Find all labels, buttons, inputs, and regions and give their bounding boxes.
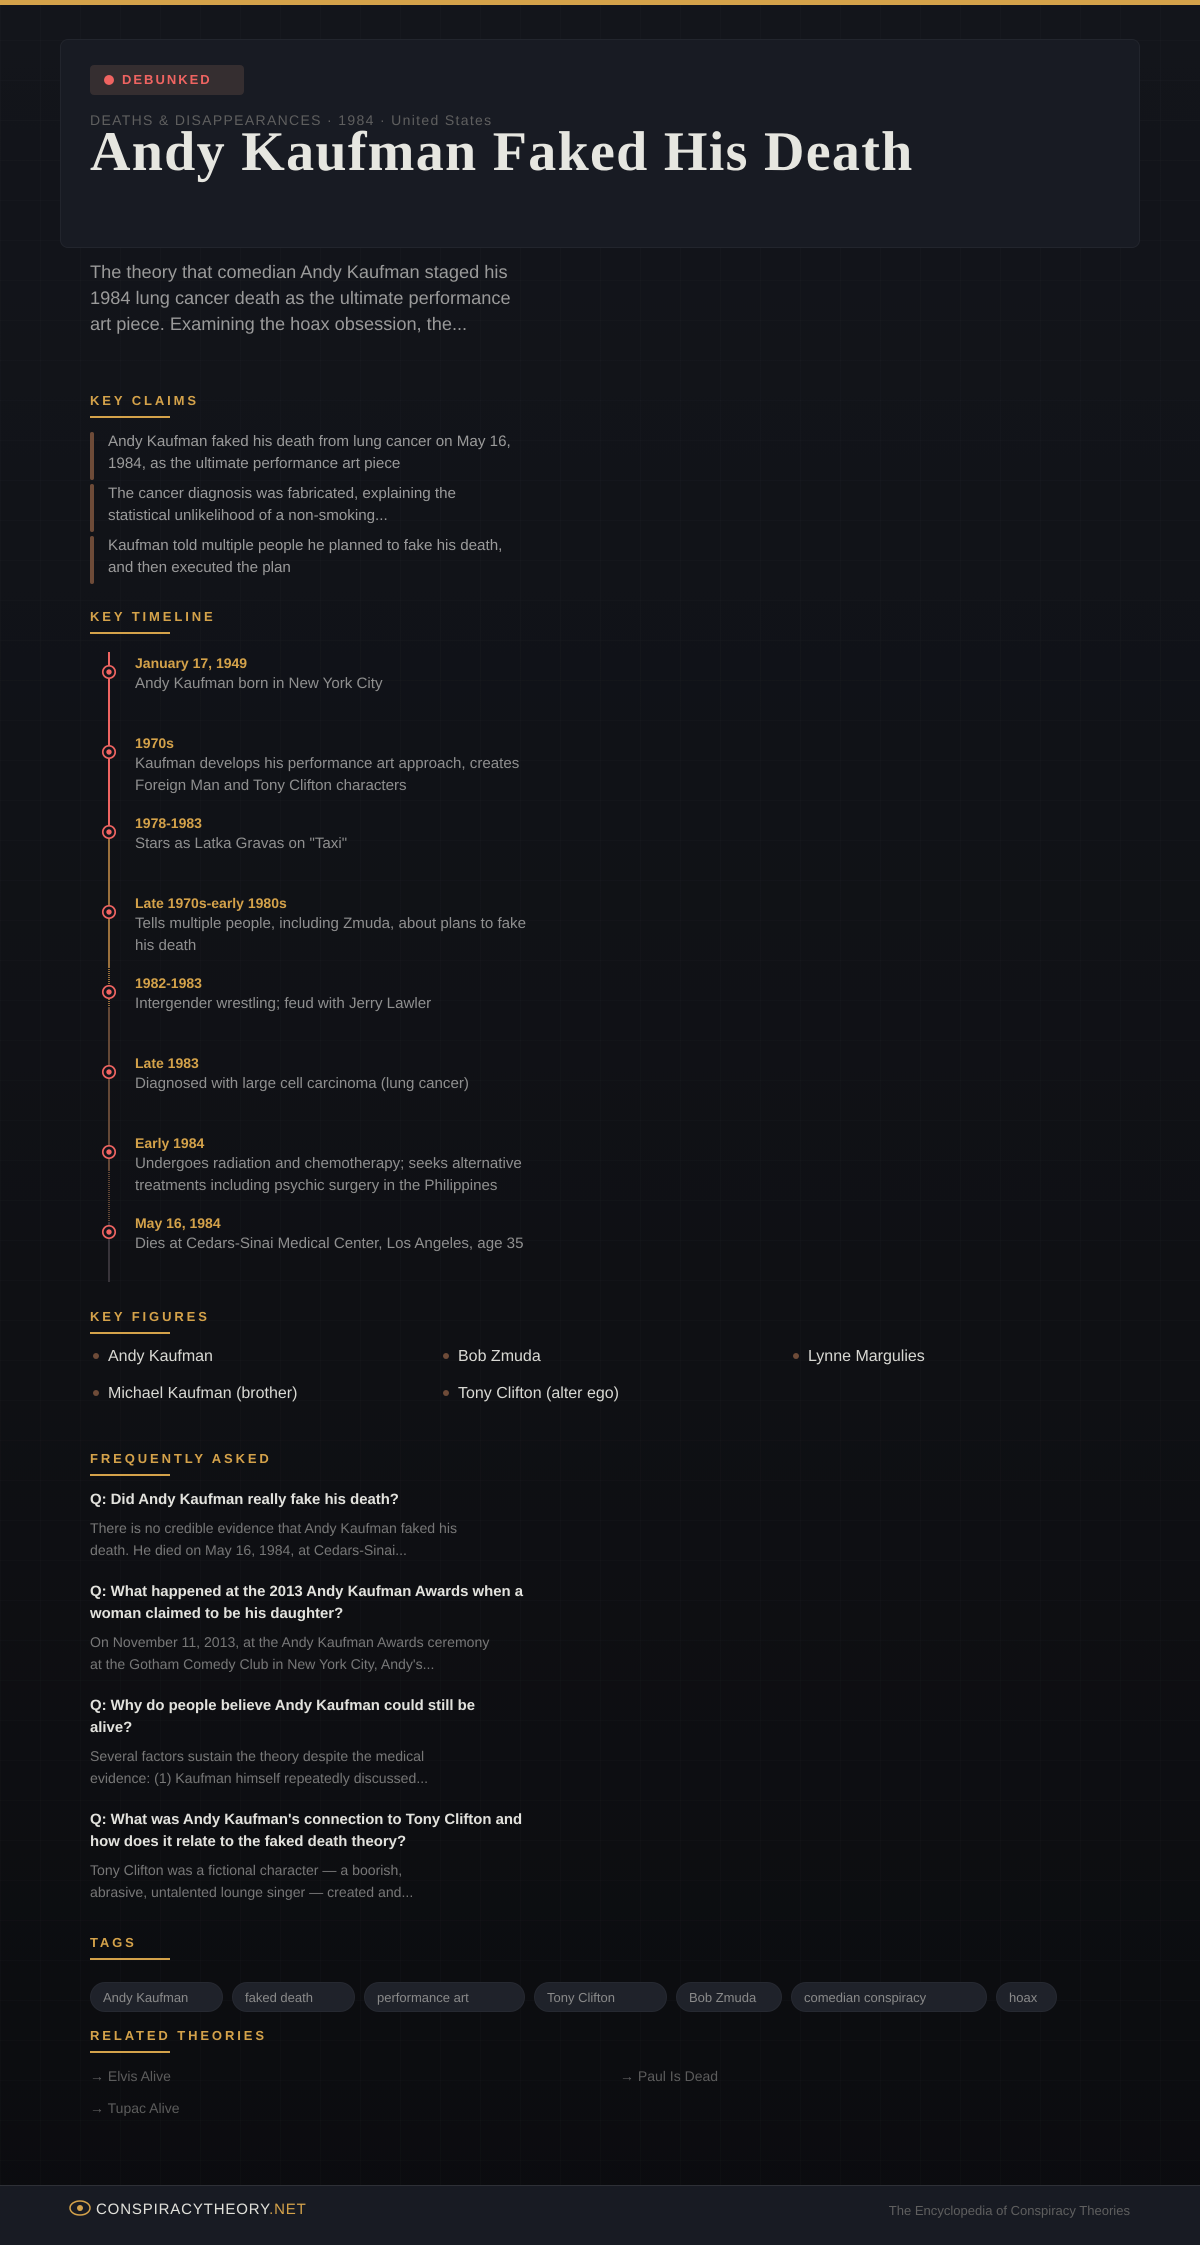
faq 4	[90, 1812, 522, 1900]
timeline item 8: May 16, 1984	[135, 1215, 221, 1231]
timeline item 1: January 17, 1949	[135, 655, 247, 671]
claim 1	[90, 432, 511, 480]
badge: debunked: DEBUNKED	[122, 72, 212, 87]
faq 4: Q: What was Andy Kaufman's connection to Tony Clifton and	[90, 1812, 522, 1828]
intro text	[90, 262, 511, 334]
timeline item 2: 1970s	[135, 735, 174, 751]
claim 2: The cancer diagnosis was fabricated, explaining the	[108, 485, 456, 502]
icon: eye	[69, 2200, 91, 2216]
faq 1: Q: Did Andy Kaufman really fake his death?	[90, 1492, 399, 1508]
claim 2: statistical unlikelihood of a non-smoking...	[108, 507, 388, 524]
brand: CONSPIRACYTHEORY.NET	[96, 2201, 307, 2218]
timeline item 4	[102, 895, 526, 954]
claim 3: and then executed the plan	[108, 559, 291, 576]
faq 2	[90, 1584, 524, 1672]
tag list	[90, 1982, 1057, 2012]
timeline item 1: Andy Kaufman born in New York City	[135, 675, 382, 692]
timeline item 1	[102, 655, 382, 692]
tag list: hoax	[1009, 1990, 1037, 2005]
timeline item 8: Dies at Cedars-Sinai Medical Center, Los Angeles, age 35	[135, 1235, 523, 1252]
faq 3: evidence: (1) Kaufman himself repeatedly discussed...	[90, 1770, 428, 1786]
top accent bar	[0, 0, 1200, 5]
intro text: 1984 lung cancer death as the ultimate performance	[90, 288, 511, 308]
tag list: comedian conspiracy	[804, 1990, 926, 2005]
timeline item 4: Late 1970s-early 1980s	[135, 895, 287, 911]
timeline item 6	[102, 1055, 469, 1092]
tag list: Tony Clifton	[547, 1990, 615, 2005]
timeline line	[108, 652, 110, 1282]
faq 2: at the Gotham Comedy Club in New York City, Andy's...	[90, 1656, 434, 1672]
faq 2: Q: What happened at the 2013 Andy Kaufman Awards when a	[90, 1584, 523, 1600]
faq 1	[90, 1492, 457, 1558]
timeline item 3	[102, 815, 347, 852]
claim 1: 1984, as the ultimate performance art piece	[108, 455, 400, 472]
claim 3	[90, 536, 502, 584]
figure: Bob Zmuda: Bob Zmuda	[458, 1348, 541, 1365]
tag list: faked death	[245, 1990, 313, 2005]
figure: Andy Kaufman: Andy Kaufman	[108, 1348, 213, 1365]
faq 1: death. He died on May 16, 1984, at Cedars-Sinai...	[90, 1542, 407, 1558]
badge: debunked	[90, 65, 244, 95]
timeline item 3: 1978-1983	[135, 815, 202, 831]
intro text: art piece. Examining the hoax obsession, the...	[90, 314, 467, 334]
timeline item 7: Early 1984	[135, 1135, 204, 1151]
timeline item 6: Diagnosed with large cell carcinoma (lung cancer)	[135, 1075, 469, 1092]
heading: tags: TAGS	[90, 1935, 137, 1950]
panel: header	[60, 39, 1140, 248]
tag list: performance art	[377, 1990, 469, 2005]
timeline item 2	[102, 735, 519, 794]
title: Andy Kaufman Faked His Death	[90, 121, 914, 183]
timeline item 5: 1982-1983	[135, 975, 202, 991]
related: Paul Is Dead: → Paul Is Dead	[620, 2068, 718, 2084]
faq 4: abrasive, untalented lounge singer — created and...	[90, 1884, 413, 1900]
footer	[0, 2185, 1200, 2245]
heading: related theories: RELATED THEORIES	[90, 2028, 267, 2043]
tag list: Andy Kaufman	[103, 1990, 188, 2005]
timeline item 4: his death	[135, 937, 196, 954]
claim 1: Andy Kaufman faked his death from lung cancer on May 16,	[108, 433, 511, 450]
heading: key figures: KEY FIGURES	[90, 1309, 210, 1324]
timeline item 7: treatments including psychic surgery in the Philippines	[135, 1177, 497, 1194]
claim 2	[90, 484, 456, 532]
claim 3: Kaufman told multiple people he planned to fake his death,	[108, 537, 502, 554]
faq 3: Q: Why do people believe Andy Kaufman could still be	[90, 1698, 475, 1714]
related: Tupac Alive: → Tupac Alive	[90, 2100, 180, 2116]
timeline item 7	[102, 1135, 522, 1194]
heading: frequently asked: FREQUENTLY ASKED	[90, 1451, 272, 1466]
figure: Tony Clifton: Tony Clifton (alter ego)	[458, 1385, 619, 1402]
tag list: Bob Zmuda	[689, 1990, 756, 2005]
timeline item 5	[102, 975, 431, 1012]
figure: Michael Kaufman: Michael Kaufman (brother)	[108, 1385, 297, 1402]
timeline item 8	[102, 1215, 523, 1252]
timeline item 5: Intergender wrestling; feud with Jerry Lawler	[135, 995, 431, 1012]
timeline item 4: Tells multiple people, including Zmuda, about plans to fake	[135, 915, 526, 932]
timeline item 2: Kaufman develops his performance art approach, creates	[135, 755, 519, 772]
faq 3: Several factors sustain the theory despite the medical	[90, 1748, 424, 1764]
timeline item 3: Stars as Latka Gravas on "Taxi"	[135, 835, 347, 852]
faq 3	[90, 1698, 475, 1786]
intro text: The theory that comedian Andy Kaufman staged his	[90, 262, 508, 282]
faq 2: woman claimed to be his daughter?	[90, 1606, 343, 1622]
heading: key timeline: KEY TIMELINE	[90, 609, 216, 624]
meta line: DEATHS & DISAPPEARANCES · 1984 · United States	[90, 112, 492, 128]
figure: Lynne Margulies: Lynne Margulies	[808, 1348, 925, 1365]
timeline item 2: Foreign Man and Tony Clifton characters	[135, 777, 407, 794]
faq 4: Tony Clifton was a fictional character — a boorish,	[90, 1862, 402, 1878]
timeline item 6: Late 1983	[135, 1055, 199, 1071]
faq 4: how does it relate to the faked death theory?	[90, 1834, 406, 1850]
related: Elvis Alive: → Elvis Alive	[90, 2068, 171, 2084]
timeline item 7: Undergoes radiation and chemotherapy; seeks alternative	[135, 1155, 522, 1172]
heading: key claims: KEY CLAIMS	[90, 393, 199, 408]
tagline: The Encyclopedia of Conspiracy Theories	[889, 2203, 1130, 2218]
faq 2: On November 11, 2013, at the Andy Kaufman Awards ceremony	[90, 1634, 489, 1650]
faq 3: alive?	[90, 1720, 132, 1736]
faq 1: There is no credible evidence that Andy Kaufman faked his	[90, 1520, 457, 1536]
